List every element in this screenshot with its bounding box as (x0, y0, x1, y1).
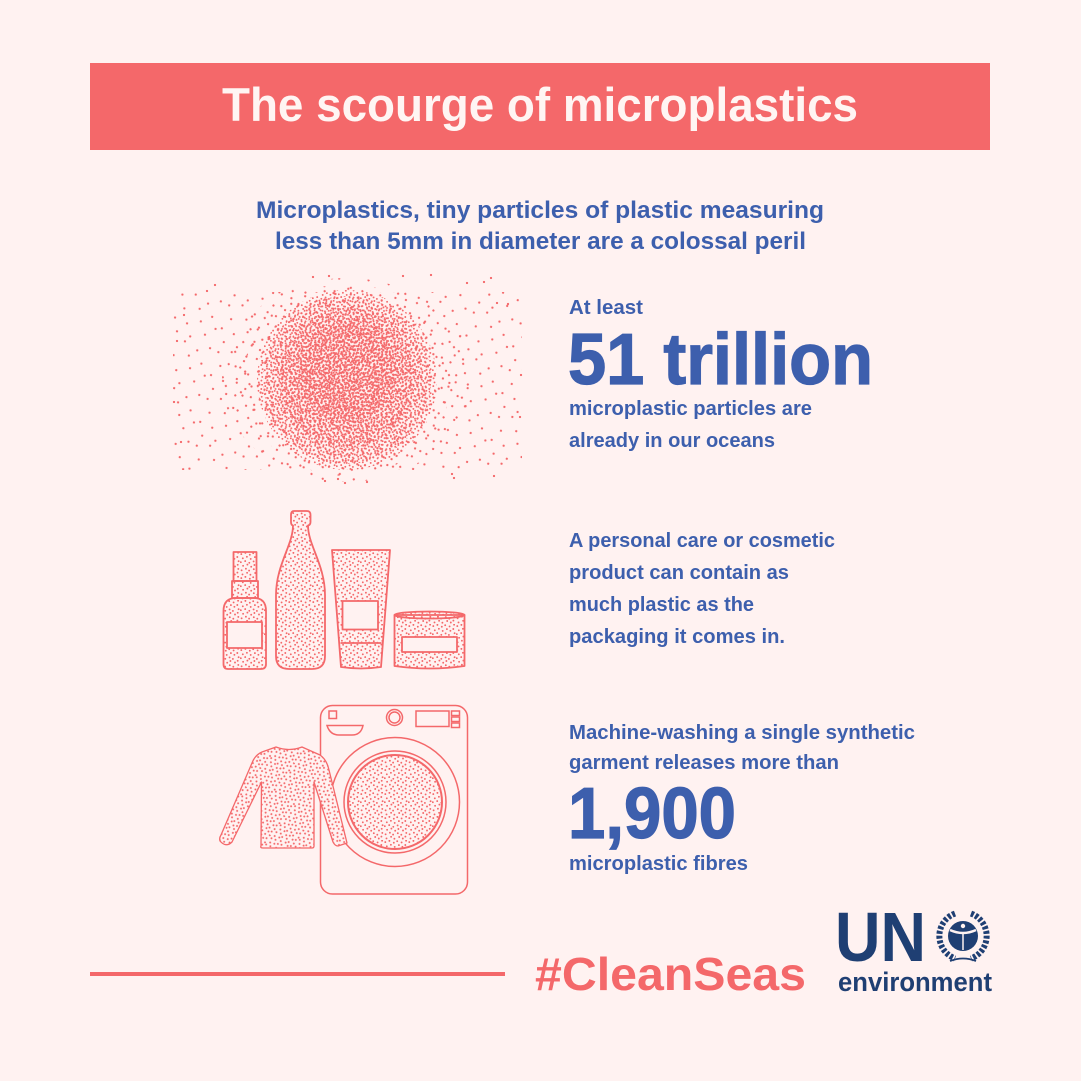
cosmetics text (569, 530, 835, 648)
stat: 51 trillion: At least (569, 297, 643, 319)
UN environment logo (835, 898, 992, 997)
wreath emblem (939, 914, 987, 961)
washing text: microplastic fibres (569, 853, 748, 875)
sweater illustration (220, 747, 347, 848)
washing text: 1,900 (568, 774, 736, 854)
title banner (90, 63, 990, 150)
tube (332, 550, 390, 668)
spray bottle (224, 552, 266, 669)
stat: 51 trillion (568, 297, 873, 452)
washing text (568, 722, 915, 875)
stat: 51 trillion: 51 trillion (568, 320, 873, 400)
hashtag: #CleanSeas (535, 948, 806, 1000)
intro text: less than 5mm in diameter are a colossal peril (275, 228, 806, 255)
intro text: Microplastics, tiny particles of plastic measuring (256, 197, 824, 224)
cosmetics text: packaging it comes in. (569, 626, 785, 648)
cosmetics text: A personal care or cosmetic (569, 530, 835, 552)
cosmetics text: much plastic as the (569, 594, 754, 616)
tall bottle (276, 511, 325, 669)
UN environment logo: environment (838, 967, 992, 997)
title: The scourge of microplastics (222, 78, 858, 131)
washing machine illustration (320, 706, 468, 894)
cosmetics text: product can contain as (569, 562, 789, 584)
stat: 51 trillion: microplastic particles are (569, 398, 812, 420)
washing text: Machine-washing a single synthetic (569, 722, 915, 744)
stat: 51 trillion: already in our oceans (569, 430, 775, 452)
cosmetics illustration (224, 511, 464, 669)
intro text (256, 197, 824, 255)
footer rule (90, 972, 505, 976)
washing text: garment releases more than (569, 752, 839, 774)
particle cloud illustration (173, 275, 522, 483)
jar (394, 612, 464, 668)
UN environment logo: UN (835, 898, 926, 976)
